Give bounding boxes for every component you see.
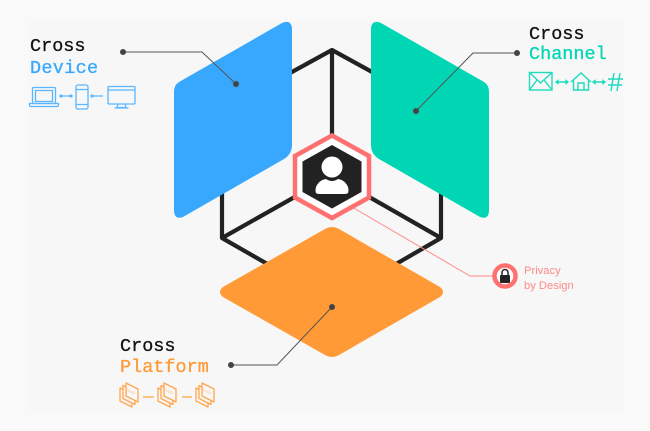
panel: orange platform plane	[220, 227, 443, 357]
label: privacy by design: by Design	[524, 280, 574, 292]
icons: devices	[30, 85, 135, 109]
icons: platform stacks	[120, 383, 214, 407]
callout line: device	[120, 49, 239, 87]
heading: cross device: Device	[30, 58, 98, 79]
cube wireframe	[222, 50, 441, 301]
connector: DMP to SSP	[143, 396, 154, 398]
stack: DMP: DMP	[126, 387, 136, 396]
heading: cross platform	[120, 336, 209, 378]
privacy connector line	[352, 207, 500, 276]
icon: privacy lock	[494, 266, 516, 286]
stack: SSP: SSP	[165, 387, 173, 396]
stack: DSP: DSP	[203, 387, 211, 396]
heading: cross channel	[529, 24, 607, 65]
callout line: platform	[228, 304, 335, 368]
heading: cross channel: Channel	[529, 44, 607, 65]
connector: SSP to DSP	[182, 396, 192, 398]
icons: channels	[530, 72, 623, 91]
heading: cross device: Cross	[30, 36, 86, 57]
label: privacy by design: Privacy	[524, 265, 561, 277]
panel: green channel plane	[371, 22, 489, 218]
panel: blue device plane	[174, 22, 292, 218]
icon: user hexagon	[295, 136, 369, 218]
label: privacy by design	[524, 265, 574, 292]
heading: cross platform: Cross	[120, 336, 176, 357]
callout line: channel	[413, 50, 520, 114]
heading: cross device	[30, 36, 98, 79]
heading: cross platform: Platform	[120, 357, 209, 378]
heading: cross channel: Cross	[529, 24, 585, 45]
